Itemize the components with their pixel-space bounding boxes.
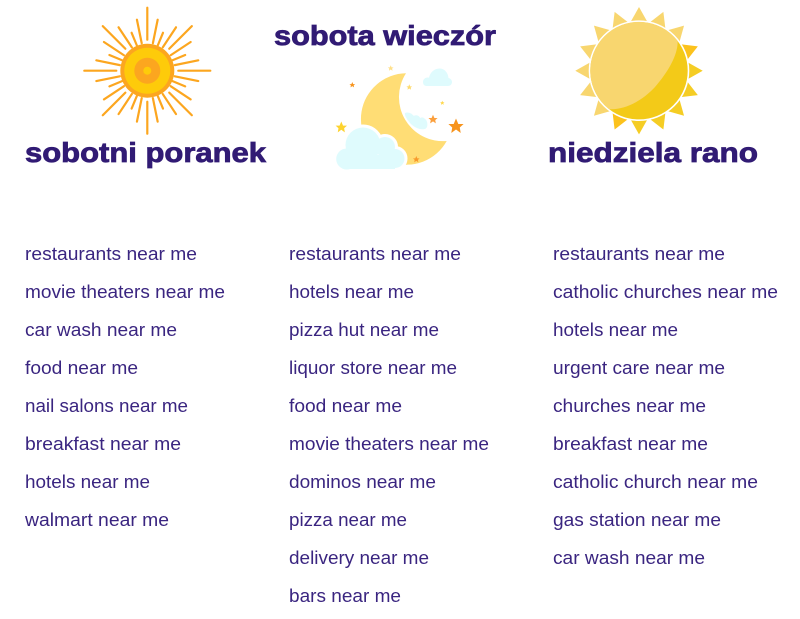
list: niedziela rano searches: catholic church near me: [553, 472, 758, 492]
list: sobota wieczór searches: delivery near me: [289, 548, 429, 568]
list: sobota wieczór searches: restaurants near me: [289, 244, 461, 264]
list: sobota wieczór searches: pizza near me: [289, 510, 407, 530]
list: sobotni poranek searches: restaurants near me: [25, 244, 197, 264]
list: sobota wieczór searches: hotels near me: [289, 282, 414, 302]
list: niedziela rano searches: breakfast near me: [553, 434, 708, 454]
list: sobota wieczór searches: food near me: [289, 396, 402, 416]
heading: niedziela rano: niedziela rano: [548, 137, 758, 168]
list: niedziela rano searches: catholic churches near me: [553, 282, 778, 302]
list: niedziela rano searches: hotels near me: [553, 320, 678, 340]
list: sobota wieczór searches: liquor store near me: [289, 358, 457, 378]
list: sobota wieczór searches: pizza hut near me: [289, 320, 439, 340]
list: niedziela rano searches: car wash near me: [553, 548, 705, 568]
icon: sunday sun with triangular rays: [575, 7, 703, 134]
list: niedziela rano searches: urgent care near me: [553, 358, 725, 378]
icon: morning sun with rays: [84, 8, 210, 134]
heading: sobota wieczór: sobota wieczór: [274, 20, 496, 51]
list: sobotni poranek searches: breakfast near me: [25, 434, 181, 454]
list: sobotni poranek searches: walmart near me: [24, 510, 169, 530]
heading: sobotni poranek: sobotni poranek: [25, 137, 266, 168]
list: niedziela rano searches: [553, 244, 778, 568]
list: sobota wieczór searches: dominos near me: [289, 472, 436, 492]
list: sobota wieczór searches: [289, 244, 489, 606]
list: niedziela rano searches: gas station near me: [553, 510, 721, 530]
list: sobotni poranek searches: hotels near me: [25, 472, 150, 492]
list: niedziela rano searches: restaurants near me: [553, 244, 725, 264]
list: sobota wieczór searches: movie theaters near me: [289, 434, 489, 454]
list: sobotni poranek searches: movie theaters near me: [25, 282, 225, 302]
list: sobotni poranek searches: nail salons near me: [25, 396, 188, 416]
icon: crescent moon, clouds and stars: [336, 65, 464, 170]
list: niedziela rano searches: churches near me: [553, 396, 706, 416]
list: sobotni poranek searches: [24, 244, 225, 530]
list: sobotni poranek searches: car wash near me: [25, 320, 177, 340]
list: sobota wieczór searches: bars near me: [289, 586, 401, 606]
list: sobotni poranek searches: food near me: [25, 358, 138, 378]
